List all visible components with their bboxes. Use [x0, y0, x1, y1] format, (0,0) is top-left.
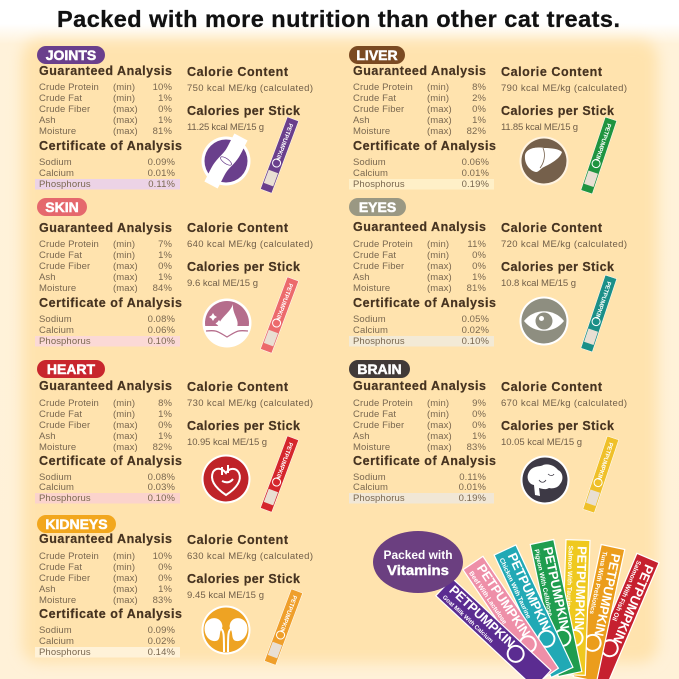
calorie content: 750 kcal ME/kg (calculated) — [187, 83, 313, 94]
guaranteed analysis: (min) — [113, 562, 135, 573]
certificate of analysis — [349, 454, 496, 504]
certificate of analysis — [349, 139, 496, 190]
certificate of analysis: Phosphorus — [39, 179, 91, 190]
stick: chicken: Chicken With Taurine — [498, 557, 532, 620]
certificate of analysis: Certificate of Analysis — [39, 454, 182, 468]
certificate of analysis: Calcium — [353, 325, 388, 336]
label: heart: HEART — [47, 361, 96, 377]
guaranteed analysis: 0% — [158, 261, 172, 272]
guaranteed analysis: (min) — [427, 93, 449, 104]
guaranteed analysis: (min) — [113, 551, 135, 562]
guaranteed analysis: (max) — [427, 420, 452, 431]
certificate of analysis: Phosphorus — [39, 647, 91, 658]
guaranteed analysis: Guaranteed Analysis — [353, 220, 486, 234]
guaranteed analysis: (min) — [427, 239, 449, 250]
calorie content: Calorie Content — [501, 65, 603, 79]
callout: packed with vitamins: Packed with — [384, 550, 452, 562]
stick: yellow: Salmon With Taurine — [565, 546, 574, 610]
stick: chicken: PETPUMPKIN — [505, 550, 554, 633]
calories per stick: Calories per Stick — [187, 419, 300, 433]
stick: brain — [583, 436, 619, 513]
certificate of analysis: Sodium — [353, 157, 386, 168]
guaranteed analysis: Moisture — [39, 595, 76, 606]
stick: kidneys — [264, 589, 303, 665]
stick: salmon — [584, 553, 659, 679]
guaranteed analysis: Guaranteed Analysis — [39, 64, 172, 78]
guaranteed analysis: (min) — [427, 398, 449, 409]
guaranteed analysis — [353, 220, 486, 294]
stick: salmon: PETPUMPKIN — [610, 562, 657, 646]
certificate of analysis: Phosphorus — [353, 493, 405, 504]
calories per stick: 10.05 kcal ME/15 g — [501, 437, 582, 448]
guaranteed analysis: Ash — [39, 431, 56, 442]
calorie content: Calorie Content — [501, 221, 603, 235]
stick: pigeon: Pigeon With Cellulose — [532, 549, 554, 617]
guaranteed analysis: 1% — [158, 93, 172, 104]
certificate of analysis — [35, 454, 182, 504]
guaranteed analysis: Ash — [39, 584, 56, 595]
guaranteed analysis: 1% — [158, 584, 172, 595]
certificate of analysis: 0.08% — [148, 314, 175, 325]
guaranteed analysis: Crude Protein — [39, 551, 99, 562]
guaranteed analysis — [39, 379, 172, 453]
certificate of analysis: Calcium — [353, 482, 388, 493]
label: brain: BRAIN — [357, 361, 402, 377]
guaranteed analysis: (max) — [427, 261, 452, 272]
stick: beef: Beef With Lactulose — [467, 570, 508, 626]
guaranteed analysis: Crude Fat — [353, 409, 396, 420]
product fan — [436, 540, 659, 679]
guaranteed analysis: (max) — [427, 283, 452, 294]
calorie content: Calorie Content — [501, 380, 603, 394]
calorie content — [187, 221, 313, 250]
guaranteed analysis: Moisture — [39, 126, 76, 137]
guaranteed analysis: Crude Fiber — [353, 261, 404, 272]
guaranteed analysis: Moisture — [39, 442, 76, 453]
calories per stick — [501, 104, 614, 133]
guaranteed analysis: Guaranteed Analysis — [39, 532, 172, 546]
guaranteed analysis — [353, 64, 486, 137]
certificate of analysis: Sodium — [39, 314, 72, 325]
calorie content: 670 kcal ME/kg (calculated) — [501, 398, 627, 409]
calories per stick: 11.85 kcal ME/15 g — [501, 122, 578, 133]
label: joints — [37, 46, 105, 64]
stick: eyes: PETPUMPKIN — [593, 280, 611, 320]
calorie content — [501, 221, 627, 250]
guaranteed analysis: (max) — [427, 431, 452, 442]
guaranteed analysis: 1% — [158, 409, 172, 420]
label: skin — [37, 198, 87, 216]
stick: yellow: PETPUMPKIN — [572, 546, 590, 630]
guaranteed analysis: Moisture — [353, 442, 390, 453]
certificate of analysis: 0.06% — [148, 325, 175, 336]
calorie content — [187, 380, 313, 409]
guaranteed analysis: 0% — [472, 420, 486, 431]
guaranteed analysis: 0% — [472, 409, 486, 420]
certificate of analysis: 0.09% — [148, 157, 175, 168]
calories per stick — [187, 260, 300, 289]
guaranteed analysis: 1% — [158, 272, 172, 283]
stick: tuna: Tuna With Prebiotics — [588, 551, 608, 615]
guaranteed analysis: 1% — [472, 115, 486, 126]
icon: kidneys — [202, 606, 250, 654]
guaranteed analysis: 83% — [153, 595, 172, 606]
certificate of analysis: Phosphorus — [353, 179, 405, 190]
certificate of analysis: Sodium — [353, 314, 386, 325]
guaranteed analysis: (max) — [427, 104, 452, 115]
guaranteed analysis: (min) — [113, 93, 135, 104]
stick: yellow — [561, 540, 590, 675]
guaranteed analysis: 7% — [158, 239, 172, 250]
guaranteed analysis: Crude Protein — [353, 82, 413, 93]
stick: beef: PETPUMPKIN — [474, 561, 533, 639]
guaranteed analysis: Crude Fat — [353, 93, 396, 104]
calorie content: 790 kcal ME/kg (calculated) — [501, 83, 627, 94]
guaranteed analysis: Guaranteed Analysis — [39, 379, 172, 393]
label: liver — [349, 46, 405, 64]
calorie content — [501, 65, 627, 94]
certificate of analysis: 0.02% — [148, 636, 175, 647]
guaranteed analysis: Ash — [353, 431, 370, 442]
panel: kidneys — [35, 515, 313, 665]
certificate of analysis: 0.10% — [462, 336, 489, 347]
guaranteed analysis: 82% — [467, 126, 486, 137]
certificate of analysis: 0.14% — [148, 647, 175, 658]
guaranteed analysis: 0% — [158, 420, 172, 431]
guaranteed analysis: Guaranteed Analysis — [353, 64, 486, 78]
stick: goat milk: Goat Milk With Calcium — [441, 595, 494, 645]
stick: kidneys: PETPUMPKIN — [278, 594, 297, 633]
stick: beef — [463, 556, 558, 679]
calories per stick: 11.25 kcal ME/15 g — [187, 122, 264, 133]
stick: chicken — [494, 545, 573, 677]
certificate of analysis: Calcium — [353, 168, 388, 179]
guaranteed analysis: Ash — [353, 272, 370, 283]
guaranteed analysis: (max) — [427, 115, 452, 126]
certificate of analysis: Phosphorus — [39, 336, 91, 347]
guaranteed analysis: Ash — [353, 115, 370, 126]
guaranteed analysis: 9% — [472, 398, 486, 409]
guaranteed analysis: 1% — [158, 250, 172, 261]
guaranteed analysis: 1% — [158, 431, 172, 442]
calorie content — [187, 65, 313, 94]
stick: heart: PETPUMPKIN — [274, 441, 293, 480]
guaranteed analysis: Moisture — [353, 126, 390, 137]
certificate of analysis: Certificate of Analysis — [39, 139, 182, 153]
stick: skin: PETPUMPKIN — [274, 282, 293, 321]
calories per stick — [187, 104, 300, 133]
certificate of analysis — [35, 296, 182, 347]
calorie content — [501, 380, 627, 409]
guaranteed analysis — [39, 64, 172, 137]
guaranteed analysis: Crude Fiber — [353, 104, 404, 115]
stick: joints — [260, 117, 299, 193]
guaranteed analysis: Crude Fat — [39, 562, 82, 573]
guaranteed analysis: Moisture — [39, 283, 76, 294]
guaranteed analysis: (max) — [113, 261, 138, 272]
guaranteed analysis: (min) — [427, 409, 449, 420]
certificate of analysis: Certificate of Analysis — [353, 296, 496, 310]
icon: heart — [202, 454, 250, 504]
stick: liver: PETPUMPKIN — [593, 122, 611, 162]
certificate of analysis — [35, 139, 182, 190]
icon: eye — [520, 296, 568, 346]
certificate of analysis: Calcium — [39, 325, 74, 336]
label: heart — [37, 360, 105, 378]
guaranteed analysis: (max) — [113, 104, 138, 115]
guaranteed analysis: Crude Fat — [39, 250, 82, 261]
calories per stick: Calories per Stick — [187, 260, 300, 274]
guaranteed analysis: Crude Protein — [39, 239, 99, 250]
guaranteed analysis: (min) — [113, 239, 135, 250]
calories per stick: 9.45 kcal ME/15 g — [187, 590, 264, 601]
stick: goat milk: PETPUMPKIN — [446, 582, 518, 651]
guaranteed analysis: Crude Fiber — [39, 261, 90, 272]
guaranteed analysis: (max) — [427, 126, 452, 137]
guaranteed analysis: (max) — [113, 420, 138, 431]
calories per stick: Calories per Stick — [501, 104, 614, 118]
guaranteed analysis: Crude Fiber — [39, 104, 90, 115]
calories per stick: 10.8 kcal ME/15 g — [501, 278, 576, 289]
label: liver: LIVER — [356, 47, 398, 63]
label: joints: JOINTS — [46, 47, 96, 63]
guaranteed analysis: Crude Fiber — [39, 573, 90, 584]
guaranteed analysis: (max) — [427, 442, 452, 453]
certificate of analysis: 0.11% — [459, 472, 486, 483]
certificate of analysis: 0.08% — [148, 472, 175, 483]
calories per stick — [187, 419, 300, 448]
certificate of analysis: Phosphorus — [353, 336, 405, 347]
certificate of analysis — [35, 607, 182, 658]
label: kidneys: KIDNEYS — [45, 516, 108, 532]
callout: packed with vitamins: Vitamins — [387, 562, 449, 578]
calorie content: 640 kcal ME/kg (calculated) — [187, 239, 313, 250]
stick: tuna — [573, 545, 625, 679]
icon: brain — [520, 456, 570, 504]
calorie content: Calorie Content — [187, 380, 289, 394]
label: eyes: EYES — [359, 199, 396, 215]
guaranteed analysis — [39, 532, 172, 606]
callout: packed with vitamins — [373, 531, 463, 593]
calorie content: 630 kcal ME/kg (calculated) — [187, 551, 313, 562]
guaranteed analysis: (min) — [113, 409, 135, 420]
stick: heart — [260, 436, 299, 512]
certificate of analysis: Calcium — [39, 636, 74, 647]
guaranteed analysis: (max) — [113, 595, 138, 606]
guaranteed analysis: 84% — [153, 283, 172, 294]
guaranteed analysis — [39, 221, 172, 294]
guaranteed analysis: 2% — [472, 93, 486, 104]
certificate of analysis: 0.10% — [148, 336, 175, 347]
guaranteed analysis: (min) — [427, 82, 449, 93]
certificate of analysis: Certificate of Analysis — [353, 139, 496, 153]
certificate of analysis: Certificate of Analysis — [39, 296, 182, 310]
panel: eyes — [349, 198, 627, 352]
guaranteed analysis: (max) — [113, 431, 138, 442]
guaranteed analysis: (min) — [113, 398, 135, 409]
certificate of analysis: 0.01% — [459, 482, 486, 493]
guaranteed analysis: (min) — [113, 250, 135, 261]
calories per stick — [501, 260, 614, 289]
panel: brain — [349, 360, 627, 513]
guaranteed analysis: Guaranteed Analysis — [39, 221, 172, 235]
stick: pigeon — [530, 540, 582, 677]
icon: liver — [520, 136, 568, 186]
stick: joints: PETPUMPKIN — [274, 122, 293, 161]
guaranteed analysis: 1% — [158, 115, 172, 126]
guaranteed analysis: 0% — [472, 104, 486, 115]
guaranteed analysis: 10% — [153, 82, 172, 93]
certificate of analysis: 0.09% — [148, 625, 175, 636]
certificate of analysis: Calcium — [39, 482, 74, 493]
certificate of analysis: 0.19% — [459, 493, 486, 504]
stick: tuna: PETPUMPKIN — [591, 552, 623, 638]
guaranteed analysis: Crude Fat — [353, 250, 396, 261]
guaranteed analysis: 82% — [153, 442, 172, 453]
guaranteed analysis: (min) — [427, 250, 449, 261]
calorie content: Calorie Content — [187, 221, 289, 235]
guaranteed analysis: Crude Protein — [353, 398, 413, 409]
guaranteed analysis: (max) — [427, 272, 452, 283]
panel: heart — [35, 360, 313, 512]
guaranteed analysis: (min) — [113, 82, 135, 93]
stick: pigeon: PETPUMPKIN — [540, 545, 572, 631]
calories per stick — [501, 419, 614, 448]
certificate of analysis: 0.05% — [462, 314, 489, 325]
icon: joint — [202, 136, 250, 186]
certificate of analysis: Sodium — [39, 472, 72, 483]
calories per stick: Calories per Stick — [187, 572, 300, 586]
certificate of analysis: 0.02% — [462, 325, 489, 336]
calories per stick — [187, 572, 300, 601]
panel: liver — [349, 46, 627, 194]
guaranteed analysis: 8% — [158, 398, 172, 409]
stick: salmon: Salmon With Fish Oil — [610, 559, 642, 622]
certificate of analysis: 0.10% — [148, 493, 175, 504]
guaranteed analysis: Crude Fat — [39, 93, 82, 104]
certificate of analysis — [349, 296, 496, 347]
certificate of analysis: Phosphorus — [39, 493, 91, 504]
label: skin: SKIN — [45, 199, 79, 215]
stick: liver — [581, 117, 617, 194]
guaranteed analysis: (max) — [113, 272, 138, 283]
guaranteed analysis: Crude Fat — [39, 409, 82, 420]
guaranteed analysis: 0% — [472, 261, 486, 272]
guaranteed analysis: (max) — [113, 115, 138, 126]
icon: skin — [202, 298, 252, 348]
guaranteed analysis: 0% — [158, 562, 172, 573]
certificate of analysis: 0.19% — [462, 179, 489, 190]
guaranteed analysis: Crude Fiber — [353, 420, 404, 431]
guaranteed analysis: Moisture — [353, 283, 390, 294]
certificate of analysis: Sodium — [39, 157, 72, 168]
panel: joints — [35, 46, 313, 193]
calories per stick: Calories per Stick — [187, 104, 300, 118]
calorie content — [187, 533, 313, 562]
guaranteed analysis: (max) — [113, 126, 138, 137]
guaranteed analysis: Crude Fiber — [39, 420, 90, 431]
certificate of analysis: Sodium — [353, 472, 386, 483]
label: brain — [349, 360, 410, 378]
title: Packed with more nutrition than other cat treats. — [57, 6, 620, 32]
guaranteed analysis: 0% — [472, 250, 486, 261]
certificate of analysis: 0.01% — [462, 168, 489, 179]
certificate of analysis: Certificate of Analysis — [39, 607, 182, 621]
label: eyes — [349, 198, 406, 216]
guaranteed analysis: 11% — [467, 239, 486, 250]
calories per stick: 9.6 kcal ME/15 g — [187, 278, 258, 289]
guaranteed analysis: (max) — [113, 283, 138, 294]
guaranteed analysis: 8% — [472, 82, 486, 93]
stick: skin — [260, 277, 299, 353]
guaranteed analysis: 81% — [153, 126, 172, 137]
guaranteed analysis: 0% — [158, 104, 172, 115]
guaranteed analysis: 1% — [472, 431, 486, 442]
calorie content: Calorie Content — [187, 533, 289, 547]
calorie content: Calorie Content — [187, 65, 289, 79]
guaranteed analysis: Ash — [39, 272, 56, 283]
guaranteed analysis: Crude Protein — [39, 398, 99, 409]
stick: brain: PETPUMPKIN — [595, 441, 613, 481]
guaranteed analysis: Crude Protein — [353, 239, 413, 250]
calories per stick: Calories per Stick — [501, 260, 614, 274]
guaranteed analysis: (max) — [113, 573, 138, 584]
guaranteed analysis: 10% — [153, 551, 172, 562]
certificate of analysis: 0.11% — [148, 179, 175, 190]
panel: skin — [35, 198, 313, 353]
stick: goat milk — [436, 578, 551, 679]
guaranteed analysis: 83% — [467, 442, 486, 453]
guaranteed analysis — [353, 379, 486, 453]
certificate of analysis: 0.01% — [148, 168, 175, 179]
guaranteed analysis: 81% — [467, 283, 486, 294]
calories per stick: 10.95 kcal ME/15 g — [187, 437, 267, 448]
certificate of analysis: Sodium — [39, 625, 72, 636]
guaranteed analysis: Guaranteed Analysis — [353, 379, 486, 393]
calories per stick: Calories per Stick — [501, 419, 614, 433]
calorie content: 730 kcal ME/kg (calculated) — [187, 398, 313, 409]
guaranteed analysis: Crude Protein — [39, 82, 99, 93]
certificate of analysis: 0.03% — [148, 482, 175, 493]
certificate of analysis: 0.06% — [462, 157, 489, 168]
stick: eyes — [581, 275, 617, 352]
guaranteed analysis: 1% — [472, 272, 486, 283]
guaranteed analysis: 0% — [158, 573, 172, 584]
guaranteed analysis: (max) — [113, 442, 138, 453]
certificate of analysis: Calcium — [39, 168, 74, 179]
certificate of analysis: Certificate of Analysis — [353, 454, 496, 468]
calorie content: 720 kcal ME/kg (calculated) — [501, 239, 627, 250]
guaranteed analysis: (max) — [113, 584, 138, 595]
guaranteed analysis: Ash — [39, 115, 56, 126]
